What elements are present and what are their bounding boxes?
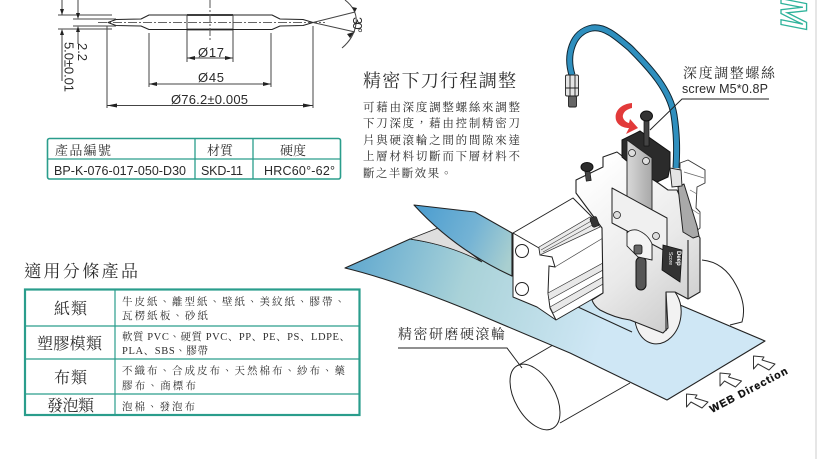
hardness column: HRC60°-62° [264, 164, 335, 178]
hard roller [500, 260, 744, 438]
row: fabric [54, 364, 346, 392]
description paragraph: 下刀深度，藉由控制精密刀 [363, 116, 520, 130]
thickness dimensions: 2.2 [75, 43, 90, 61]
gray adjustment strip [627, 140, 652, 260]
rear fins [680, 160, 705, 232]
hose fitting right [670, 168, 682, 187]
description paragraph: 片與硬滾輪之間的間隙來達 [363, 133, 520, 147]
row: plastic [37, 330, 350, 357]
hose fitting left [566, 75, 578, 107]
row: foam: 泡棉、發泡布 [122, 400, 196, 413]
hardness column [264, 143, 335, 178]
right page edge [815, 0, 817, 459]
air hose [570, 28, 677, 168]
description paragraph: 上層材料切斷而下層材料不 [363, 149, 520, 163]
label: precision hard roller [398, 326, 522, 368]
row: fabric: 布類 [54, 369, 88, 387]
hardness column: 硬度 [280, 143, 306, 158]
web material lower sheet [345, 239, 765, 400]
spec table [47, 138, 341, 179]
adjustment screw [640, 111, 652, 146]
cylinder screw [589, 216, 599, 228]
diameter 17 dimension: Ø17 [198, 45, 224, 60]
description paragraph: 可藉由深度調整螺絲來調整 [363, 100, 520, 114]
part number column [54, 143, 186, 178]
row: paper: 瓦楞紙板、砂紙 [122, 309, 208, 322]
label: depth adjustment screw: 深度調整螺絲 [683, 65, 776, 82]
diameter 45 dimension: Ø45 [198, 70, 224, 85]
web direction arrows [686, 356, 775, 408]
strip screws [628, 150, 650, 164]
web direction label: WEB Direction [708, 365, 790, 416]
cutting blade disc [631, 281, 685, 347]
thickness dimensions: 5.0±0.01 [62, 42, 76, 92]
material column: SKD-11 [201, 164, 243, 178]
row: foam: 發泡類 [47, 397, 95, 415]
label: precision hard roller: 精密研磨硬滾輪 [398, 326, 505, 343]
label: depth adjustment screw: screw M5*0.8P [682, 82, 768, 96]
red rotation arrow [616, 103, 638, 134]
row: foam [47, 397, 196, 415]
row: paper [54, 295, 345, 322]
web material upper flap [414, 205, 512, 276]
brand label plate [662, 245, 682, 282]
main plate [576, 152, 700, 333]
blade slot and side edge [666, 240, 688, 331]
part number column: BP-K-076-017-050-D30 [54, 164, 186, 178]
blade dimension drawing [58, 0, 365, 108]
material column: 材質 [207, 143, 234, 158]
blade profile [98, 0, 325, 40]
row: paper: 紙類 [54, 300, 88, 318]
machine illustration [345, 28, 790, 438]
description paragraph [363, 100, 520, 180]
sheet roller contact line [578, 307, 632, 332]
side lever [678, 184, 699, 238]
pneumatic cylinder block [513, 198, 603, 320]
cut fold [410, 228, 482, 262]
30 degree angle dimension [313, 0, 365, 48]
row: plastic: 軟質 PVC、硬質 PVC、PP、PE、PS、LDPE、 [122, 330, 350, 343]
label: depth adjustment screw [650, 65, 776, 130]
applicable products table [25, 289, 360, 416]
brand label plate: Deep [675, 251, 681, 266]
row: fabric: 膠布、商標布 [122, 379, 196, 392]
30 degree angle dimension: 30° [350, 17, 365, 33]
front bracket plate [612, 188, 667, 260]
description paragraph: 斷之半斷效果。 [363, 166, 452, 180]
plate knob [581, 162, 593, 181]
row: plastic: 塑膠模類 [37, 335, 103, 353]
row: paper: 牛皮紙、離型紙、壁紙、美紋紙、膠帶、 [122, 295, 345, 308]
row: plastic: PLA、SBS、膠帶 [122, 344, 208, 357]
heading: applicable products: 適用分條產品 [24, 262, 138, 281]
heading: depth adjustment: 精密下刀行程調整 [363, 71, 516, 91]
thickness dimensions [58, 0, 116, 92]
diameter 76.2 dimension [107, 26, 313, 108]
row: fabric: 不織布、合成皮布、天然棉布、紗布、藥 [122, 364, 346, 377]
part number column: 產品編號 [55, 143, 111, 158]
diameter 76.2 dimension: Ø76.2±0.005 [171, 92, 248, 107]
adjustment slot [636, 257, 646, 290]
brand label plate: Score [667, 252, 673, 265]
diameter 17 dimension [187, 30, 233, 62]
diameter 45 dimension [149, 33, 271, 87]
material column [201, 143, 243, 178]
depth block [622, 131, 670, 182]
